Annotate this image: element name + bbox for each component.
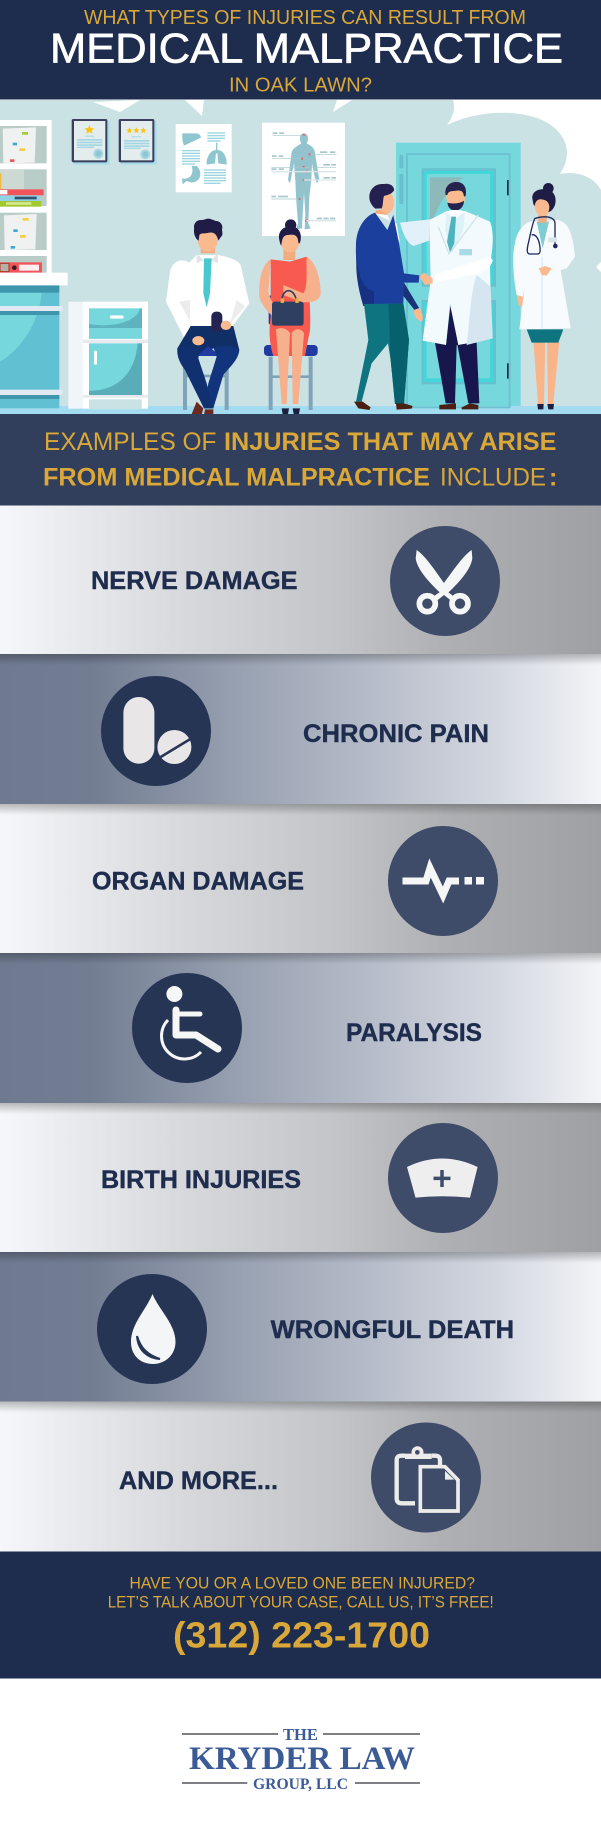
title line: in Oak Lawn: IN OAK LAWN?	[229, 74, 372, 96]
call to action text: LET’S TALK ABOUT YOUR CASE, CALL US, IT’S FREE!	[108, 1594, 494, 1612]
logo: The Kryder Law Group, LLC: GROUP, LLC	[253, 1776, 348, 1793]
label: AND MORE...	[119, 1467, 278, 1495]
illustration: doctor's office	[0, 100, 601, 415]
title line: what types of injuries: WHAT TYPES OF INJURIES CAN RESULT FROM	[84, 7, 526, 29]
label: ORGAN DAMAGE	[92, 868, 304, 896]
row: birth injuries	[0, 1103, 601, 1252]
phone number: (312) 223-1700	[173, 1614, 430, 1655]
nurse	[513, 183, 575, 409]
icon: drop	[97, 1274, 207, 1384]
teal door	[396, 143, 521, 407]
seated patient	[166, 219, 249, 415]
patient shaking hands	[354, 184, 423, 410]
row: organ damage	[0, 804, 601, 953]
row: paralysis	[0, 953, 601, 1103]
row: chronic pain	[0, 654, 601, 804]
icon: nurse cap	[388, 1123, 498, 1233]
logo: The Kryder Law Group, LLC: KRYDER LAW	[189, 1741, 415, 1777]
label: PARALYSIS	[346, 1019, 482, 1047]
icon: heartbeat	[388, 826, 498, 936]
teal counter	[0, 273, 68, 408]
framed certificates	[72, 119, 157, 165]
icon: pills	[101, 676, 211, 786]
subheading band	[0, 414, 601, 506]
header banner	[0, 0, 601, 100]
shelving unit	[0, 120, 52, 273]
white cabinet	[68, 302, 148, 409]
subheading line two: INCLUDE	[440, 464, 546, 492]
label: WRONGFUL DEATH	[271, 1316, 514, 1344]
subheading line one: EXAMPLES OF	[44, 428, 216, 456]
row: nerve damage	[0, 506, 601, 654]
subheading line two: :	[549, 464, 557, 492]
white background cut-outs	[93, 100, 601, 272]
call to action text: HAVE YOU OR A LOVED ONE BEEN INJURED?	[130, 1575, 475, 1593]
body diagram poster	[262, 123, 345, 236]
icon: clipboard and document	[371, 1422, 481, 1532]
label: CHRONIC PAIN	[303, 720, 489, 748]
row: wrongful death	[0, 1252, 601, 1402]
call to action text	[108, 1575, 494, 1612]
floor	[0, 406, 601, 414]
subheading line one	[44, 428, 556, 456]
row: and more	[0, 1402, 601, 1552]
logo: The Kryder Law Group, LLC: THE	[283, 1725, 318, 1744]
anatomy poster: organs	[176, 124, 232, 192]
label: NERVE DAMAGE	[91, 567, 298, 595]
doctor	[400, 182, 493, 409]
subheading line one: INJURIES THAT MAY ARISE	[224, 428, 556, 456]
icon: wheelchair	[132, 973, 242, 1083]
subheading line two: FROM MEDICAL MALPRACTICE	[43, 464, 430, 492]
seated woman	[259, 219, 321, 414]
label: BIRTH INJURIES	[101, 1166, 301, 1194]
title: medical malpractice: MEDICAL MALPRACTICE	[50, 25, 563, 72]
call to action footer	[0, 1552, 601, 1678]
logo: The Kryder Law Group, LLC	[182, 1725, 420, 1793]
icon: scissors	[390, 526, 500, 636]
